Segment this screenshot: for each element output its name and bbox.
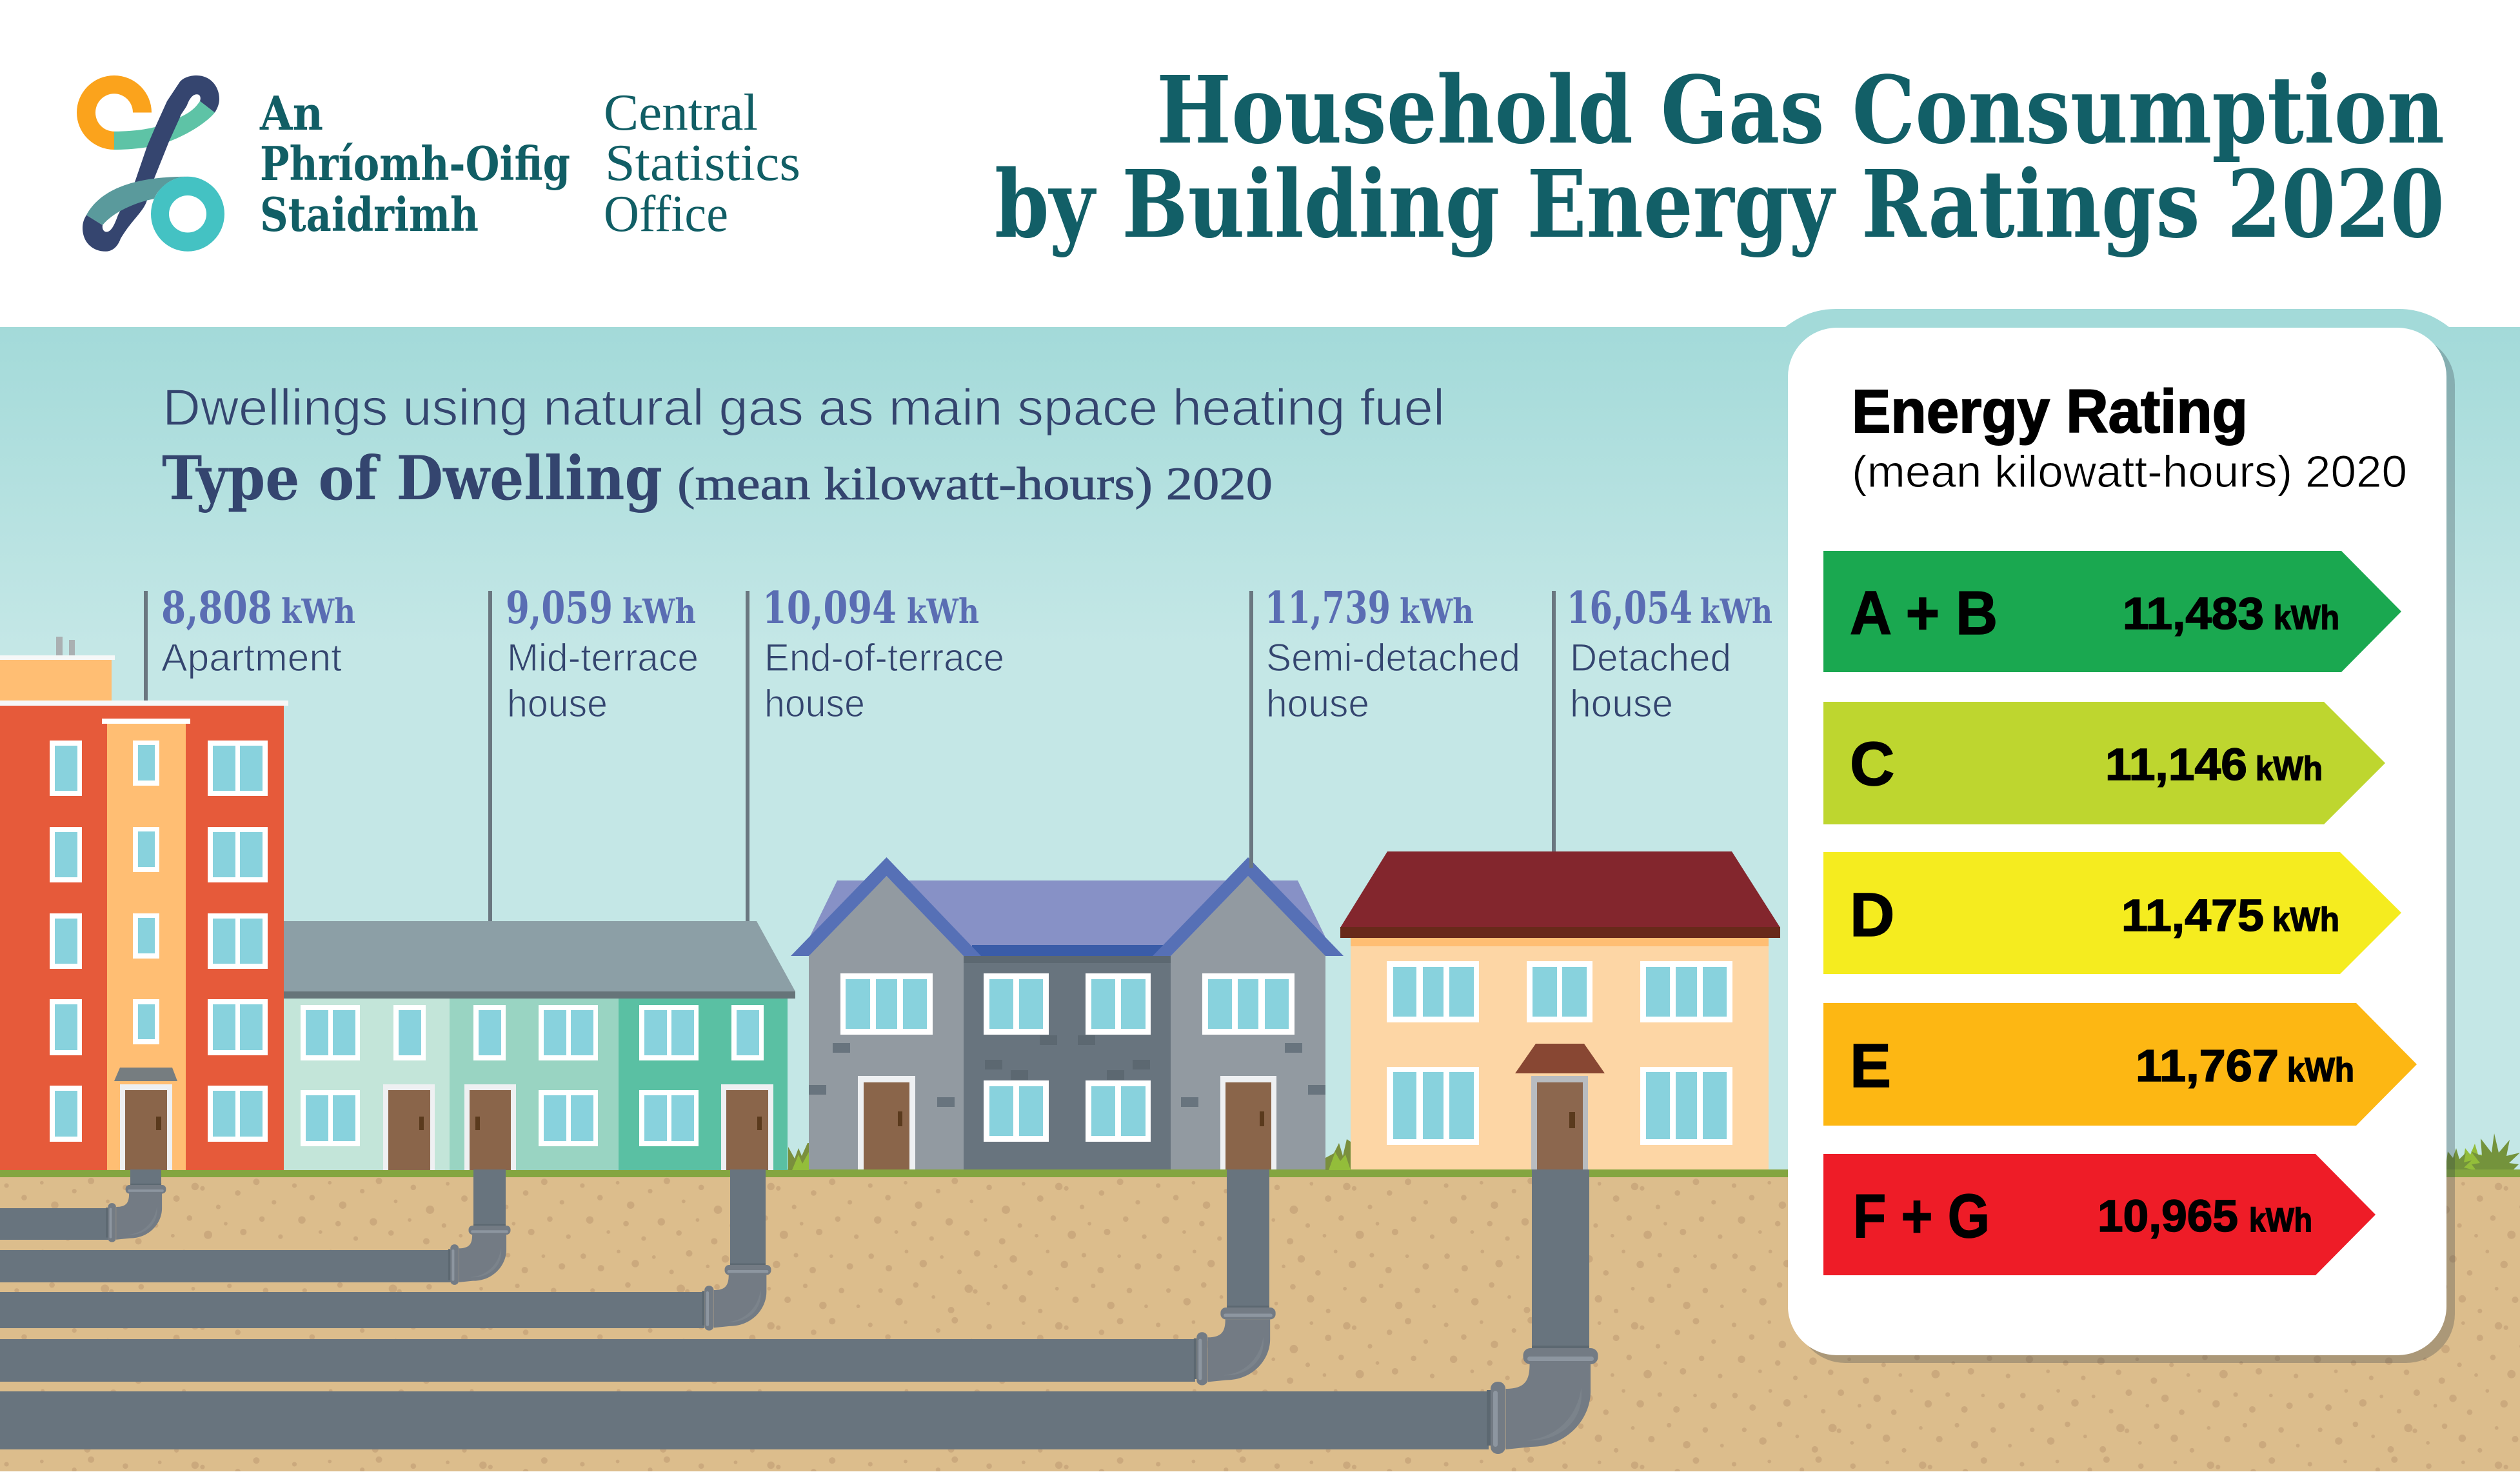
panel top backing <box>1785 309 2449 327</box>
label: detached house: Detached <box>1570 636 1731 679</box>
rating bar: E: kWh <box>2287 1051 2354 1089</box>
apartment window glass <box>55 745 263 1137</box>
sky background <box>0 327 2520 1179</box>
pipe: end-of-terrace <box>0 1169 771 1331</box>
gable roofs <box>791 857 981 956</box>
semi-detached window frames <box>840 973 1295 1142</box>
rating bar: A + B: kWh <box>2274 599 2339 637</box>
label: end-of-terrace house: End-of-terrace <box>764 636 1004 679</box>
rating bar: C <box>1823 702 2385 824</box>
label: semi-detached house: house <box>1266 682 1369 725</box>
detached house <box>1340 851 1780 1169</box>
semi-detached window glass <box>846 979 1289 1136</box>
logo English name <box>604 85 800 243</box>
detached canopy <box>1515 1044 1605 1073</box>
grass tufts <box>788 1133 2520 1170</box>
label: detached house: house <box>1570 682 1673 725</box>
stair column <box>107 722 186 1170</box>
rating bar: F + G <box>1823 1154 2376 1275</box>
label: apartment <box>161 582 355 679</box>
lilac roof <box>810 880 1325 956</box>
label: semi-detached house <box>1265 582 1520 725</box>
logo Irish name: Phríomh-Oifig <box>260 136 570 191</box>
panel heading: Energy Rating <box>1852 377 2248 446</box>
rating bar: C: kWh <box>2256 750 2323 788</box>
canopy <box>114 1068 177 1081</box>
label: semi-detached house: Semi-detached <box>1266 636 1520 679</box>
logo Irish name: Staidrimh <box>260 187 479 242</box>
pipe: detached <box>0 1169 1598 1454</box>
rating bar: A + B: 11,483 <box>2123 588 2264 639</box>
roof block <box>0 660 112 701</box>
panel heading <box>1852 377 2407 497</box>
terrace window frames <box>301 1005 764 1146</box>
rating bar: D: 11,475 <box>2121 890 2264 940</box>
label: end-of-terrace house: kWh <box>907 592 979 632</box>
rating bar: F + G: F + G <box>1853 1182 1990 1251</box>
label: apartment: kWh <box>281 592 355 632</box>
panel: energy rating <box>1785 309 2455 1363</box>
rating bar: E <box>1823 1003 2417 1126</box>
label: apartment: 8,808 <box>161 582 272 634</box>
rating bar: C: 11,146 <box>2105 739 2247 790</box>
logo Irish name: An <box>259 86 323 141</box>
label: semi-detached house: kWh <box>1400 592 1474 632</box>
grass strip <box>0 1169 2520 1177</box>
label: detached house: kWh <box>1700 592 1772 632</box>
label: end-of-terrace house: house <box>764 682 865 725</box>
detached roof <box>1340 851 1780 928</box>
label: mid-terrace house: house <box>507 682 608 725</box>
chimneys <box>56 637 63 655</box>
label: mid-terrace house: kWh <box>622 592 696 632</box>
centre bricks <box>985 1035 1150 1080</box>
logo English name: Office <box>604 186 728 243</box>
label: end-of-terrace house <box>762 582 1004 725</box>
leader lines <box>144 591 1556 921</box>
semi-detached doors <box>858 1076 1276 1169</box>
terrace walls <box>284 999 450 1170</box>
section heading: type of dwelling: Dwellings using natural gas as main space heating fuel <box>163 379 1445 436</box>
ground <box>0 1169 2520 1471</box>
terrace window glass <box>306 1010 759 1141</box>
pipe: mid-terrace <box>0 1169 510 1285</box>
pipes <box>0 1169 1598 1454</box>
rating bar: F + G: 10,965 <box>2098 1191 2238 1241</box>
bricks <box>809 1043 1325 1107</box>
logo: Central Statistics Office <box>77 75 800 252</box>
label: end-of-terrace house: 10,094 <box>762 582 897 634</box>
rating bar: E: E <box>1850 1031 1891 1100</box>
label: semi-detached house: 11,739 <box>1265 582 1391 634</box>
terraced houses <box>284 921 795 1170</box>
label: detached house: 16,054 <box>1567 582 1692 634</box>
rating bar: C: C <box>1850 730 1894 799</box>
detached wall <box>1351 938 1769 1169</box>
label: detached house <box>1567 582 1772 725</box>
panel heading: (mean kilowatt-hours) 2020 <box>1852 446 2407 497</box>
label: mid-terrace house: Mid-terrace <box>507 636 699 679</box>
title <box>995 55 2445 259</box>
terrace doors <box>383 1084 773 1170</box>
apartment door <box>120 1084 172 1170</box>
panel shadow <box>1796 335 2455 1363</box>
semi-detached houses <box>791 857 1344 1169</box>
rating bar: F + G: kWh <box>2249 1202 2312 1239</box>
apartment window frames <box>50 741 268 1142</box>
pipe: semi-detached <box>0 1169 1276 1386</box>
label: mid-terrace house: 9,059 <box>506 582 613 634</box>
label: apartment: Apartment <box>161 636 342 679</box>
rating bar: E: 11,767 <box>2136 1040 2279 1091</box>
logo Irish name <box>259 86 570 242</box>
section heading: type of dwelling: (mean kilowatt-hours) 2020 <box>677 458 1273 510</box>
rating bar: D <box>1823 852 2401 974</box>
section heading: type of dwelling: Type of Dwelling <box>162 443 662 514</box>
logo mark <box>77 75 224 252</box>
dark roof strip <box>972 945 1163 956</box>
centre wall <box>964 956 1171 1169</box>
rating bar: D: D <box>1850 880 1894 950</box>
rating bar: A + B: A + B <box>1850 579 1998 648</box>
soil <box>0 1177 2520 1471</box>
section heading: type of dwelling <box>162 379 1445 514</box>
pipe: apartment <box>0 1169 166 1242</box>
main wall <box>0 705 284 1170</box>
rating bar: A + B <box>1823 551 2401 672</box>
side wings <box>809 956 964 1169</box>
detached door <box>1531 1076 1588 1169</box>
apartment building <box>0 637 288 1170</box>
logo English name: Statistics <box>605 135 800 192</box>
logo English name: Central <box>604 85 758 141</box>
panel card <box>1788 328 2446 1355</box>
rating bar: D: kWh <box>2272 901 2339 939</box>
terrace roof <box>284 921 795 991</box>
detached window glass <box>1393 967 1727 1139</box>
detached window frames <box>1387 961 1732 1145</box>
label: mid-terrace house <box>506 582 699 725</box>
